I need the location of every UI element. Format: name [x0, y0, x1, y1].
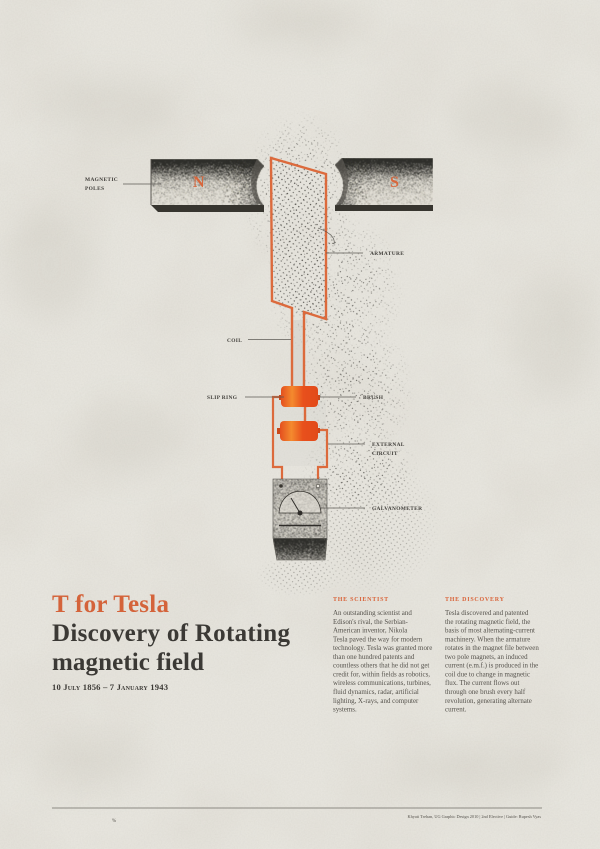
label: magnetic poles [85, 177, 161, 192]
column: the discovery: two pole magnets, an induced [445, 653, 528, 661]
column: the scientist: credit for, within fields as robotics, [333, 670, 430, 678]
armature coil [271, 158, 334, 386]
column: the scientist: lighting, X-rays, and computer [333, 697, 419, 705]
column: the scientist: fluid dynamics, radar, artificial [333, 688, 419, 696]
column: the scientist: wireless communications, turbines, [333, 679, 431, 687]
label: armature: ARMATURE [370, 251, 404, 257]
label: external circuit: EXTERNAL [372, 442, 405, 448]
left magnet (N pole) [151, 159, 264, 212]
label: coil [227, 338, 291, 344]
column: the discovery: current (e.m.f.) is produced in the [445, 662, 538, 670]
label: galvanometer: GALVANOMETER [372, 506, 422, 512]
label: brush [320, 395, 384, 401]
column: the scientist: An outstanding scientist and [333, 609, 412, 617]
right magnet (S pole) [335, 158, 433, 211]
column: the discovery: THE DISCOVERY [445, 597, 505, 603]
label: magnetic poles: POLES [85, 186, 104, 192]
label: external circuit [328, 442, 405, 457]
label: magnetic poles: MAGNETIC [85, 177, 118, 183]
label: external circuit: CIRCUIT [372, 451, 398, 457]
column: the discovery: basis of most alternating-current [445, 626, 535, 634]
heading: discovery of rotating magnetic field: magnetic field [52, 649, 204, 676]
label: armature [326, 251, 404, 257]
label: galvanometer [320, 506, 422, 512]
column: the discovery: through one brush every half [445, 688, 526, 696]
column: the discovery: the rotating magnetic field, the [445, 618, 530, 626]
column: the scientist: than one hundred patents and [333, 653, 415, 661]
page mark: % [112, 819, 116, 824]
column: the discovery: current. [445, 706, 467, 714]
column: the discovery: Tesla discovered and patented [445, 609, 529, 617]
column: the discovery: flux. The current flows out [445, 679, 520, 687]
column: the scientist: countless others that he did not get [333, 662, 429, 670]
column: the scientist: American inventor, Nikola [333, 626, 407, 634]
halftone stipple cloud [246, 116, 438, 595]
column: the discovery: rotates in the magnet file between [445, 644, 539, 652]
label: brush: BRUSH [363, 395, 384, 401]
column: the scientist [333, 597, 432, 714]
title: T for Tesla: T for Tesla [52, 591, 170, 618]
heading: discovery of rotating magnetic field [52, 620, 290, 676]
column: the scientist: THE SCIENTIST [333, 597, 389, 603]
column: the discovery: revolution, generating alternate [445, 697, 532, 705]
column: the discovery: machinery. When the armature [445, 636, 530, 644]
column: the scientist: Edison's rival, the Serbian- [333, 618, 409, 626]
slip ring lower [277, 421, 320, 441]
letter S: S [390, 174, 399, 191]
column: the discovery [445, 597, 539, 714]
label: coil: COIL [227, 338, 242, 344]
label: slip ring: SLIP RING [207, 395, 238, 401]
heading: discovery of rotating magnetic field: Discovery of Rotating [52, 620, 290, 647]
slip ring upper [279, 386, 320, 421]
column: the scientist: Tesla paved the way for modern [333, 636, 423, 644]
galvanometer [273, 479, 327, 560]
external circuit wires [273, 397, 327, 485]
footer credit: Khyati Trehan, UG Graphic Design 2010 | 2nd Elective | Guide: Rupesh Vyas [407, 814, 541, 820]
column: the scientist: technology. Tesla was granted more [333, 644, 432, 652]
column: the discovery: coil due to change in magnetic [445, 670, 530, 678]
footer rule [52, 808, 542, 809]
dates: 10 July 1856 – 7 January 1943 [52, 682, 168, 692]
column: the scientist: systems. [333, 706, 357, 714]
letter N: N [193, 174, 205, 191]
label: slip ring [207, 395, 284, 401]
